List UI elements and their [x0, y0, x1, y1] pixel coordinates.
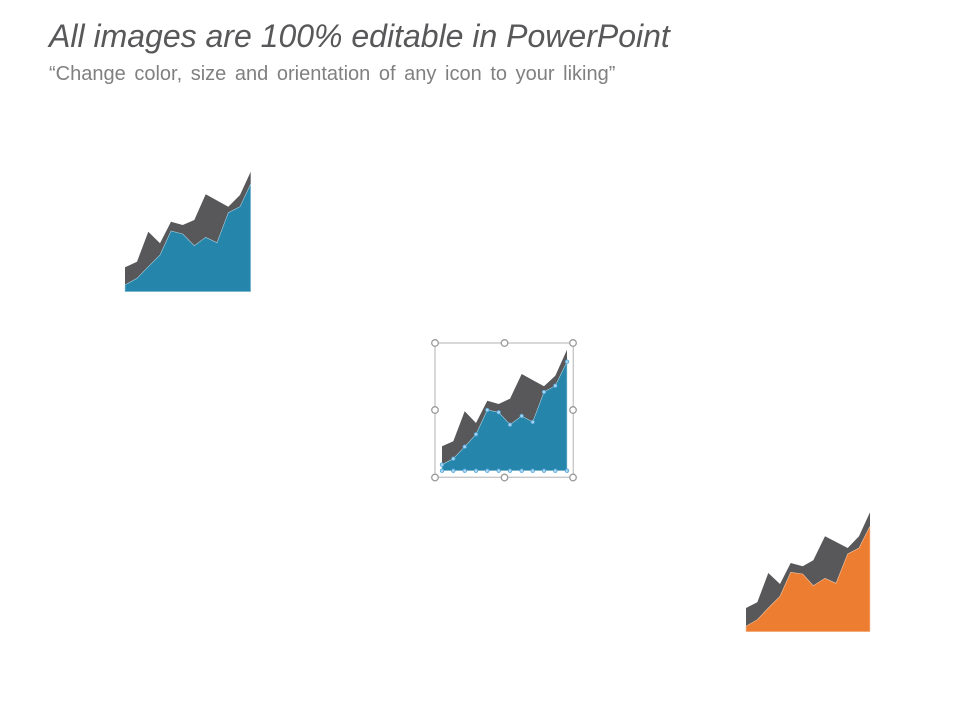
subtitle: “Change color, size and orientation of any icon to your liking” [49, 63, 615, 85]
selection frame [435, 343, 573, 477]
area chart: blue selected, center [432, 340, 576, 481]
area chart: blue top-left [125, 172, 251, 292]
selection handles [432, 340, 576, 481]
dark area [442, 350, 567, 471]
blue area [442, 362, 567, 471]
area chart: orange bottom-right [746, 512, 870, 632]
title: All images are 100% editable in PowerPoint [49, 18, 670, 54]
data point markers [440, 360, 569, 473]
